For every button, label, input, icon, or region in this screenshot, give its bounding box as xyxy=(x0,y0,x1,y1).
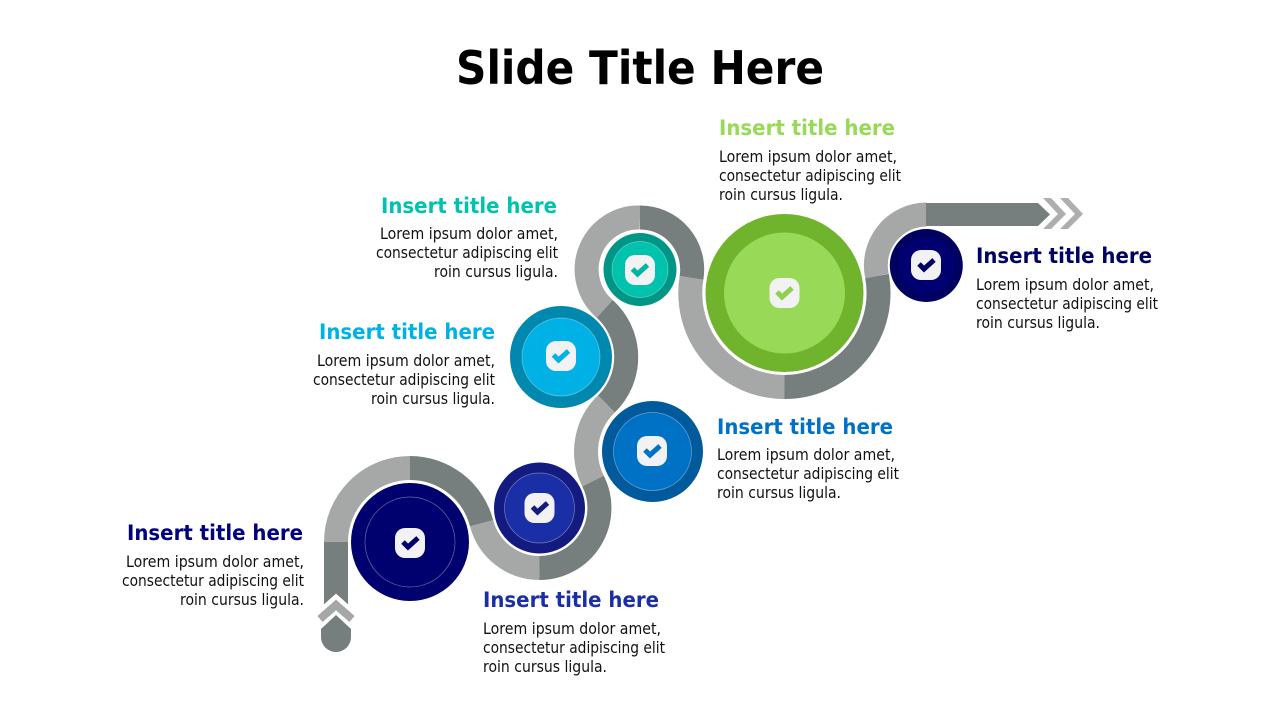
text block: green xyxy=(719,116,901,204)
path segments xyxy=(336,214,926,568)
node 1: navy circle xyxy=(348,480,472,604)
text block: dark navy: consectetur adipiscing elit xyxy=(976,294,1158,313)
text block: navy left: consectetur adipiscing elit xyxy=(122,571,304,590)
text block: navy left: roin cursus ligula. xyxy=(180,590,304,609)
text block: navy left xyxy=(122,521,304,609)
text block: green: Lorem ipsum dolor amet, xyxy=(719,147,897,166)
text block: teal xyxy=(376,194,558,281)
text block: green: consectetur adipiscing elit xyxy=(719,166,901,185)
text block: green: Insert title here xyxy=(719,116,895,140)
text block: royal blue: consectetur adipiscing elit xyxy=(483,638,665,657)
text block: blue xyxy=(717,415,899,502)
text block: teal: Insert title here xyxy=(381,194,557,218)
text block: dark navy: Lorem ipsum dolor amet, xyxy=(976,275,1154,294)
node 3: blue circle xyxy=(600,399,705,504)
text block: blue: roin cursus ligula. xyxy=(717,483,841,502)
title: Slide Title Here xyxy=(456,41,824,95)
text block: blue: Lorem ipsum dolor amet, xyxy=(717,445,895,464)
text block: royal blue: Insert title here xyxy=(483,588,659,612)
text block: sky blue: Lorem ipsum dolor amet, xyxy=(317,351,495,370)
text block: teal: Lorem ipsum dolor amet, xyxy=(380,224,558,243)
node 7: dark navy circle xyxy=(888,227,965,304)
text block: royal blue: roin cursus ligula. xyxy=(483,657,607,676)
text block: royal blue xyxy=(483,588,665,676)
text block: dark navy: roin cursus ligula. xyxy=(976,313,1100,332)
node 4: sky blue circle xyxy=(508,304,614,410)
text block: sky blue: consectetur adipiscing elit xyxy=(313,370,495,389)
text block: green: roin cursus ligula. xyxy=(719,185,843,204)
text block: sky blue: roin cursus ligula. xyxy=(371,389,495,408)
path start with chevron xyxy=(318,541,354,652)
text block: sky blue xyxy=(313,320,495,408)
node 5: teal circle xyxy=(602,231,678,308)
arrow end xyxy=(926,198,1083,229)
text block: navy left: Insert title here xyxy=(127,521,303,545)
node 2: royal blue circle xyxy=(492,460,587,556)
text block: dark navy xyxy=(976,244,1158,332)
winding path xyxy=(318,198,1083,652)
text block: royal blue: Lorem ipsum dolor amet, xyxy=(483,619,661,638)
text block: teal: consectetur adipiscing elit xyxy=(376,243,558,262)
text block: sky blue: Insert title here xyxy=(319,320,495,344)
text block: blue: Insert title here xyxy=(717,415,893,439)
text block: navy left: Lorem ipsum dolor amet, xyxy=(126,552,304,571)
node 6: green circle xyxy=(704,212,866,374)
text block: teal: roin cursus ligula. xyxy=(434,262,558,281)
text block: blue: consectetur adipiscing elit xyxy=(717,464,899,483)
text block: dark navy: Insert title here xyxy=(976,244,1152,268)
